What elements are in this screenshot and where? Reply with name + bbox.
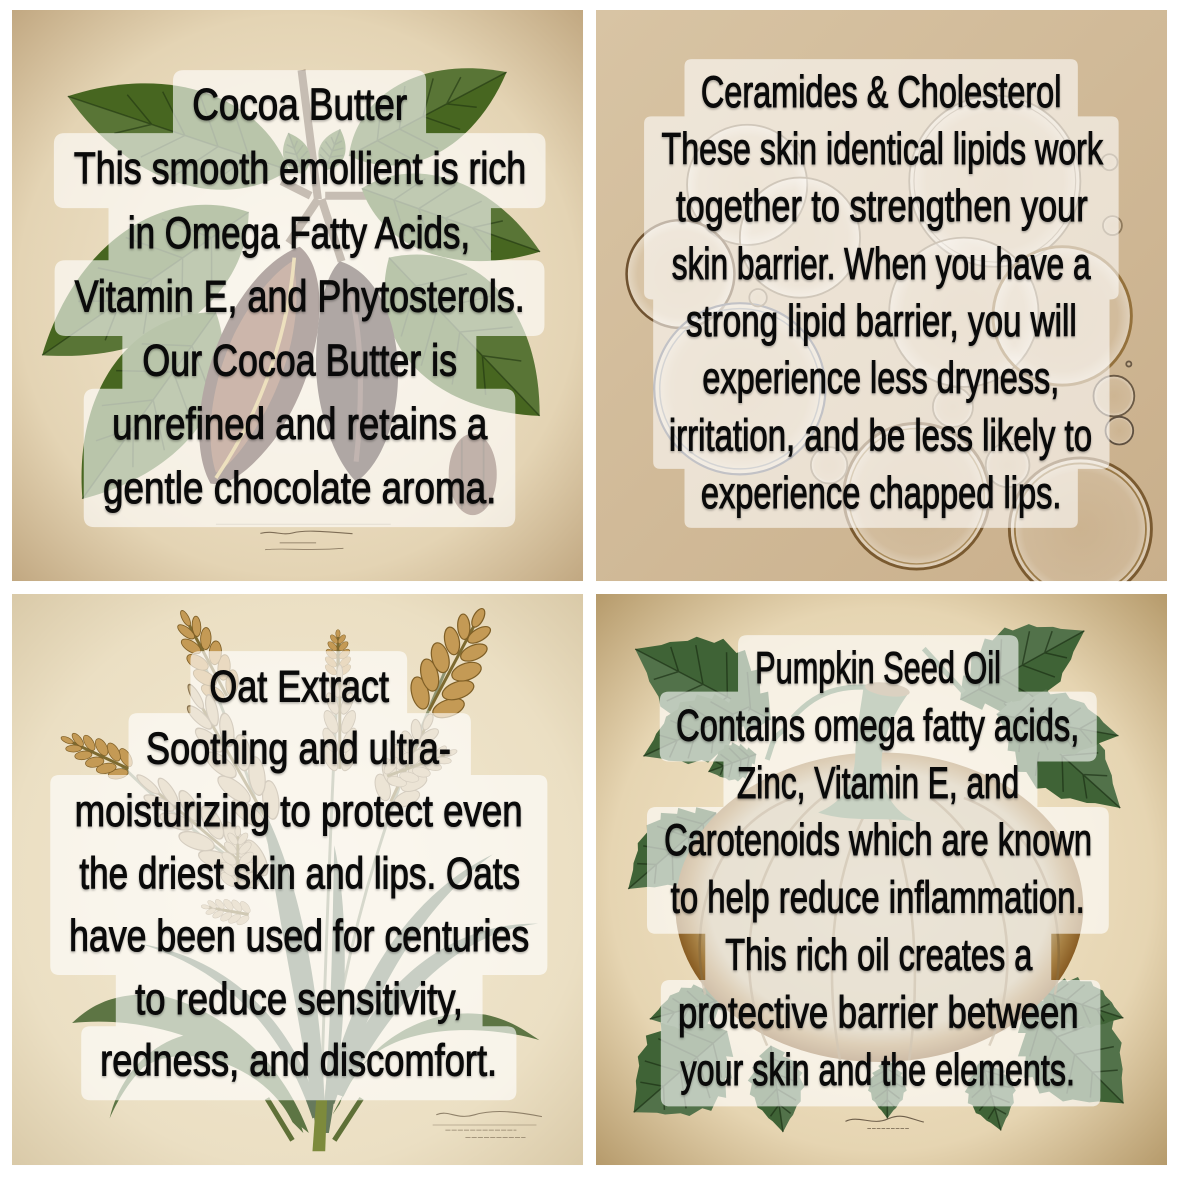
- text: Cocoa Butter: unrefined and retains a: [112, 400, 488, 449]
- illustration: bubbles: [627, 96, 1151, 600]
- text: Cocoa Butter: Vitamin E, and Phytosterols.: [75, 273, 525, 322]
- panel: Oat Extract: [12, 593, 583, 1165]
- text: Ceramides & Cholesterol: experience chapped lips.: [701, 469, 1061, 518]
- text: Cocoa Butter: This smooth emollient is rich: [74, 145, 526, 194]
- text bands: [50, 651, 547, 1100]
- text: Oat Extract: moisturizing to protect even: [75, 787, 523, 836]
- text: Cocoa Butter: Our Cocoa Butter is: [142, 336, 457, 385]
- panel: Cocoa Butter: [11, 10, 583, 581]
- caption: botanical script: [433, 1112, 542, 1137]
- text: Cocoa Butter: in Omega Fatty Acids,: [128, 209, 470, 258]
- text: Ceramides & Cholesterol: [662, 68, 1104, 518]
- caption: botanical script: [845, 1116, 924, 1129]
- text: Pumpkin Seed Oil: [664, 644, 1092, 1095]
- text: Cocoa Butter: gentle chocolate aroma.: [103, 464, 496, 513]
- panel: Pumpkin Seed Oil: [596, 594, 1167, 1165]
- illustration: pumpkin and leaves: [628, 624, 1124, 1132]
- text: Ceramides & Cholesterol: experience less dryness,: [702, 354, 1059, 403]
- text: Oat Extract: Soothing and ultra-: [146, 724, 451, 773]
- caption: botanical script: [216, 524, 391, 550]
- text: Pumpkin Seed Oil: protective barrier between: [678, 988, 1079, 1037]
- text: Oat Extract: to reduce sensitivity,: [135, 975, 463, 1024]
- heading: Oat Extract: [209, 662, 389, 711]
- text: Oat Extract: redness, and discomfort.: [100, 1036, 497, 1085]
- text: Pumpkin Seed Oil: Zinc, Vitamin E, and: [737, 759, 1019, 808]
- text: Pumpkin Seed Oil: This rich oil creates a: [725, 931, 1033, 980]
- panel: Ceramides & Cholesterol: [596, 10, 1167, 600]
- text: Cocoa Butter: [74, 80, 526, 513]
- text bands: [647, 635, 1109, 1106]
- heading: Pumpkin Seed Oil: [755, 644, 1001, 693]
- illustration: oat plant: [53, 593, 539, 1151]
- text: Oat Extract: [69, 662, 529, 1085]
- text: Oat Extract: have been used for centuries: [69, 912, 529, 961]
- heading: Cocoa Butter: [192, 80, 407, 129]
- illustration: cocoa branch, leaves and pods: [11, 37, 581, 529]
- text: Oat Extract: the driest skin and lips. Oats: [79, 849, 520, 898]
- text bands: [644, 59, 1119, 528]
- text bands: [54, 70, 546, 527]
